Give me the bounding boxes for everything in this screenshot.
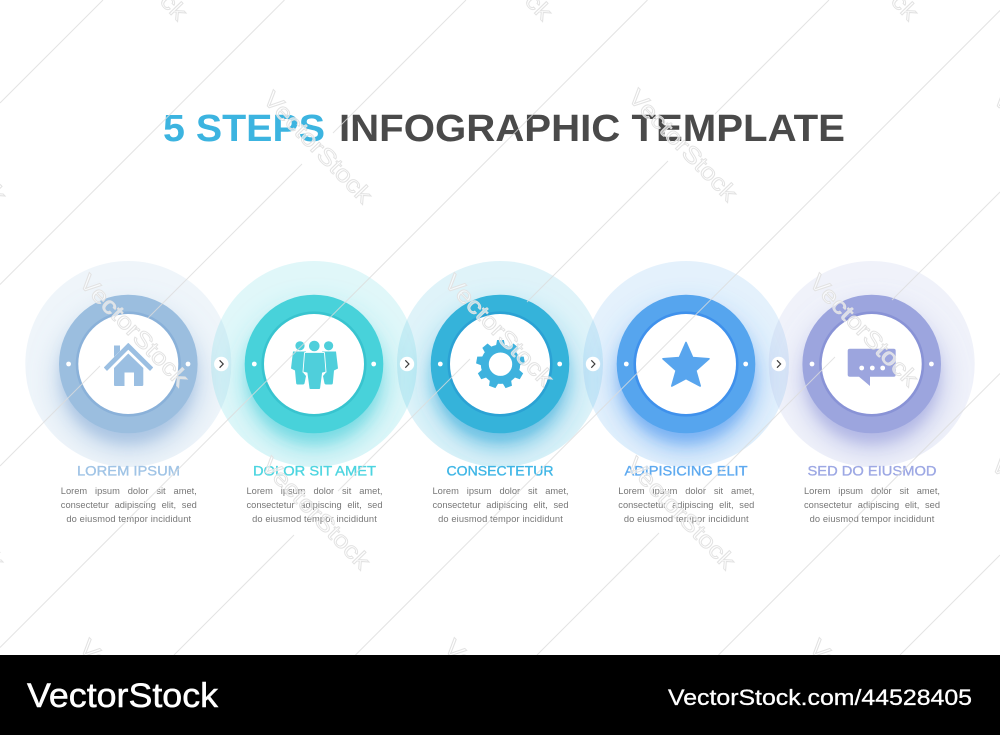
inner band 4 — [633, 311, 739, 417]
dots 2 — [252, 362, 376, 366]
ring 2 — [245, 295, 383, 433]
body text 3: do eiusmod tempor incididunt — [438, 514, 563, 524]
body text 2: consectetur adipiscing elit, sed — [246, 500, 382, 510]
white disc 5 — [822, 314, 922, 414]
footer bar — [0, 655, 1000, 735]
body text 4 — [618, 486, 754, 524]
body text 1 — [61, 486, 197, 524]
shadow 3 — [429, 308, 573, 452]
body text 5: consectetur adipiscing elit, sed — [804, 500, 940, 510]
body text 1: Lorem ipsum dolor sit amet, — [61, 486, 197, 496]
icon: gear — [476, 340, 525, 389]
halo 1 — [25, 261, 231, 467]
icon: speech bubble — [848, 349, 896, 386]
body text 5: do eiusmod tempor incididunt — [810, 514, 934, 524]
title — [163, 107, 845, 150]
footer logo text: VectorStock — [27, 677, 219, 715]
arrow 4 to 5 — [772, 357, 786, 371]
dots 1 — [66, 362, 190, 366]
inner band 1 — [76, 311, 181, 417]
heading 4: ADIPISICING ELIT — [624, 462, 748, 478]
inner band 5 — [819, 311, 924, 417]
step 5: circle graphic — [769, 261, 975, 467]
body text 3 — [432, 486, 568, 524]
dots 5 — [810, 362, 934, 366]
ring 1 — [59, 295, 198, 433]
shadow 1 — [57, 308, 201, 452]
watermark text: VectorStock — [74, 269, 194, 392]
shadow 5 — [801, 308, 945, 452]
heading 1: LOREM IPSUM — [77, 462, 180, 478]
title accent: 5 steps: 5 STEPS — [163, 107, 325, 150]
body text 2: Lorem ipsum dolor sit amet, — [246, 486, 382, 496]
body text 3: consectetur adipiscing elit, sed — [432, 500, 568, 510]
body text 4: Lorem ipsum dolor sit amet, — [618, 486, 754, 496]
heading 2: DOLOR SIT AMET — [253, 462, 376, 478]
halo 4 — [583, 261, 789, 467]
step 3: circle graphic — [397, 261, 603, 467]
body text 5: Lorem ipsum dolor sit amet, — [804, 486, 940, 496]
body text 3: Lorem ipsum dolor sit amet, — [432, 486, 568, 496]
body text 2: do eiusmod tempor incididunt — [252, 514, 377, 524]
watermark text: VectorStock — [804, 269, 924, 392]
icon: house — [104, 344, 152, 386]
ring 4 — [617, 295, 755, 433]
arrow 3 to 4 — [586, 357, 600, 371]
title main: infographic template: INFOGRAPHIC TEMPLATE — [339, 107, 845, 150]
watermark text: VectorStock — [623, 84, 743, 207]
heading 3: CONSECTETUR — [446, 462, 554, 478]
body text 1: do eiusmod tempor incididunt — [66, 514, 191, 524]
heading 5: SED DO EIUSMOD — [808, 462, 936, 478]
halo 2 — [211, 261, 417, 467]
dots 3 — [438, 362, 562, 366]
body text 4: consectetur adipiscing elit, sed — [618, 500, 754, 510]
inner band 3 — [447, 311, 553, 417]
white disc 1 — [78, 314, 178, 414]
halo 5 — [769, 261, 975, 467]
inner band 2 — [261, 311, 367, 417]
step headings — [77, 462, 936, 478]
shadow 4 — [615, 308, 759, 452]
watermark text: VectorStock — [621, 452, 741, 575]
step 2: circle graphic — [211, 261, 417, 467]
arrow 1 to 2 — [214, 357, 228, 371]
icon: people — [291, 341, 338, 390]
dots 4 — [624, 362, 748, 366]
watermark text: VectorStock — [256, 452, 376, 575]
body text 5 — [804, 486, 940, 524]
step 4: circle graphic — [583, 261, 789, 467]
watermark text: VectorStock — [439, 269, 559, 392]
ring 3 — [431, 295, 569, 433]
step 1: circle graphic — [25, 261, 231, 467]
arrow 2 to 3 — [400, 357, 414, 371]
halo 3 — [397, 261, 603, 467]
watermark text: VectorStock — [258, 86, 378, 209]
ring 5 — [802, 295, 941, 433]
icon: star — [663, 342, 709, 386]
white disc 3 — [450, 314, 550, 414]
white disc 4 — [636, 314, 736, 414]
body text 2 — [246, 486, 382, 524]
white disc 2 — [264, 314, 364, 414]
shadow 2 — [243, 308, 387, 452]
body text 1: consectetur adipiscing elit, sed — [61, 500, 197, 510]
body text 4: do eiusmod tempor incididunt — [624, 514, 749, 524]
footer url text: VectorStock.com/44528405 — [668, 685, 972, 710]
